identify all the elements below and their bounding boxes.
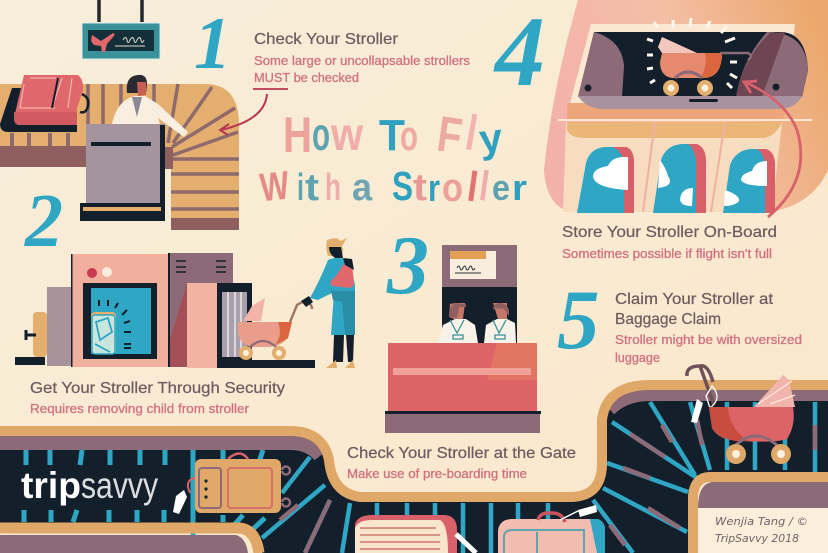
step 1 description: Some large or uncollapsable strollers <box>254 53 470 68</box>
icon: check-in desk <box>80 124 165 221</box>
icon: gate info board <box>450 251 496 279</box>
underline and arrow: MUST to conveyor <box>220 89 288 135</box>
title: l <box>465 163 481 211</box>
title: r <box>428 168 440 210</box>
icon: x-ray bag contents <box>91 312 116 354</box>
step 5 description: luggage <box>615 350 660 365</box>
icon: open overhead bin <box>570 18 808 109</box>
step 2 number: 2 <box>24 179 63 263</box>
title: H <box>283 107 312 163</box>
credit: TripSavvy 2018 <box>715 532 799 545</box>
step 2 description: Requires removing child from stroller <box>30 401 250 416</box>
title: i <box>297 167 304 209</box>
step 4 description: Sometimes possible if flight isn't full <box>562 246 772 261</box>
icon: airport departure sign <box>82 0 160 59</box>
icon: stroller at security <box>238 298 312 360</box>
title: e <box>492 167 510 208</box>
step 3 heading: Check Your Stroller at the Gate <box>347 445 576 462</box>
title: h <box>325 167 341 209</box>
illustration: gate desk with agents <box>385 245 541 433</box>
title: y <box>477 116 505 162</box>
figure: check-in agent <box>112 75 188 137</box>
step 3 description: Make use of pre-boarding time <box>347 466 527 481</box>
title: t <box>305 167 319 209</box>
title: o <box>400 112 418 159</box>
title: S <box>392 163 413 209</box>
step 1 description: MUST be checked <box>254 70 359 85</box>
icon: red suitcase on belt <box>0 75 88 132</box>
icon: cabin windows with clouds <box>577 144 775 213</box>
title: o <box>442 166 463 210</box>
credit: Wenjia Tang / © <box>715 515 808 528</box>
title: T <box>379 111 405 160</box>
title: F <box>434 106 466 164</box>
title: r <box>512 167 527 208</box>
title: a <box>352 167 373 209</box>
figure: gate agent right <box>484 303 516 343</box>
title: t <box>413 167 427 209</box>
title: w <box>330 108 363 160</box>
figure: gate agent left <box>438 303 478 343</box>
logo: tripsavvy: trip <box>21 465 81 506</box>
figure: parent holding child <box>301 238 355 368</box>
title: W <box>258 164 292 210</box>
title: o <box>312 108 330 160</box>
icon: striped bag at bottom <box>355 515 476 553</box>
step 2 heading: Get Your Stroller Through Security <box>30 380 285 397</box>
icon: stroller on carousel <box>687 366 795 464</box>
title: l <box>477 162 492 210</box>
illustration: security scanner <box>15 238 355 368</box>
step 5 heading: Claim Your Stroller at <box>615 291 774 308</box>
arrow: to overhead bin <box>744 81 801 217</box>
illustration: airplane cabin with overhead bin <box>544 0 828 217</box>
logo: tripsavvy: savvy <box>81 465 158 506</box>
step 3 number: 3 <box>386 219 429 312</box>
icon: stroller in bin <box>658 37 751 96</box>
step 5 description: Stroller might be with oversized <box>615 332 802 347</box>
step 4 heading: Store Your Stroller On-Board <box>562 224 777 241</box>
step 5 number: 5 <box>557 273 600 367</box>
title <box>258 105 527 211</box>
step 5 heading: Baggage Claim <box>615 311 721 328</box>
title: l <box>462 105 481 161</box>
icon: tan suitcase on carousel <box>173 454 290 514</box>
step 1 number: 1 <box>194 3 231 85</box>
baggage carousel <box>0 385 828 553</box>
step 1 heading: Check Your Stroller <box>254 31 399 48</box>
icon: pink suitcase at bottom <box>498 505 605 553</box>
illustration: check-in counter with conveyor <box>0 75 239 230</box>
